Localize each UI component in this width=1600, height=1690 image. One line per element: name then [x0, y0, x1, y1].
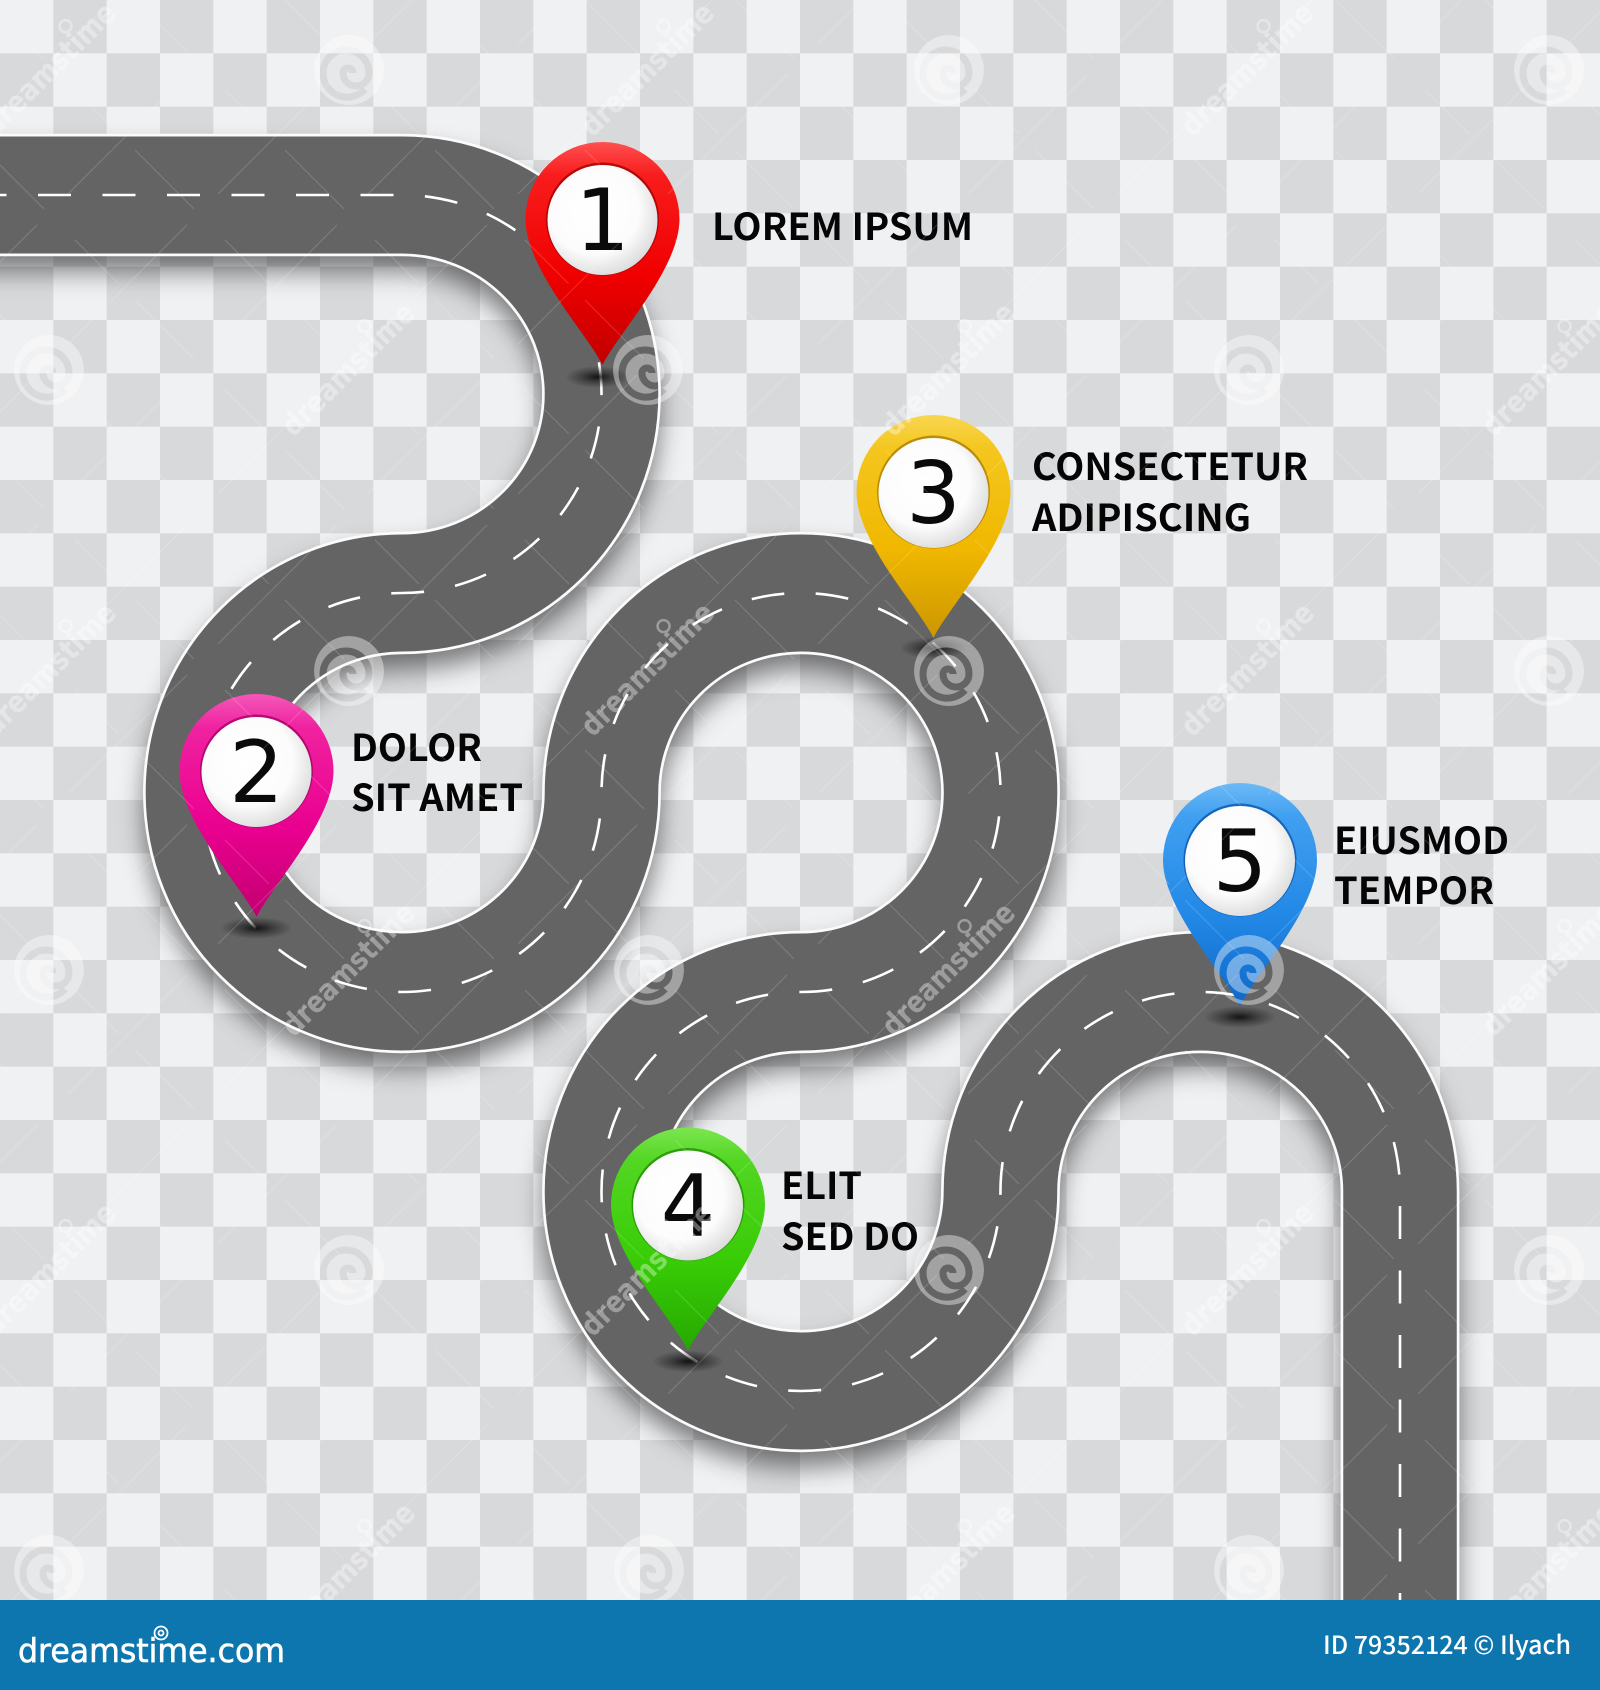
label 1: LOREM IPSUM: [712, 197, 973, 251]
watermark overlay: dreamstime: [875, 1496, 1023, 1644]
label 5: TEMPOR: [1334, 861, 1494, 915]
watermark overlay: dreamstime: [1174, 596, 1322, 744]
pin 2: magenta: [180, 694, 334, 939]
pin 4: green: 4: [661, 1156, 715, 1256]
watermark overlay: dreamstime: [574, 596, 722, 744]
pin 5: blue: [1163, 783, 1317, 1028]
footer logo swirl: [154, 1626, 168, 1640]
road centre dashes: [0, 195, 1400, 1600]
pin 1: red: 1: [575, 171, 630, 271]
label 2: DOLOR: [351, 718, 482, 772]
watermark overlay: dreamstime: [1174, 1196, 1322, 1344]
winding road: [0, 195, 1400, 1656]
image id and credit: ID 79352124 © Ilyach: [1323, 1626, 1571, 1662]
pin 4: green: [611, 1128, 765, 1372]
road white edge: [0, 195, 1400, 1640]
label 2: [351, 718, 523, 822]
road drop shadow: [0, 211, 1400, 1656]
label 5: EIUSMOD: [1334, 811, 1509, 865]
watermark overlay: dreamstime: [875, 296, 1023, 444]
pin 5: blue: 5: [1213, 812, 1267, 912]
label 3: ADIPISCING: [1031, 488, 1251, 542]
watermark overlay: dreamstime: [875, 896, 1023, 1044]
watermark overlay: dreamstime: [275, 1496, 423, 1644]
label 3: CONSECTETUR: [1032, 437, 1308, 491]
label 4: [781, 1156, 919, 1261]
road asphalt: [0, 195, 1400, 1640]
watermark overlay: dreamstime: [275, 896, 423, 1044]
pin 3: yellow: 3: [906, 444, 961, 544]
label 5: [1334, 811, 1509, 915]
watermark overlay: dreamstime: [275, 296, 423, 444]
footer logo text: dreamstime.com: [18, 1631, 285, 1670]
footer bar: [0, 1600, 1600, 1690]
pin 3: yellow: [856, 415, 1010, 659]
pin 1: red: [526, 142, 680, 388]
label 4: ELIT: [781, 1156, 862, 1210]
pin 2: magenta: 2: [229, 723, 284, 823]
label 2: SIT AMET: [351, 768, 523, 822]
watermark overlay: dreamstime: [574, 1196, 722, 1344]
label 4: SED DO: [781, 1207, 919, 1261]
label 3: [1031, 437, 1308, 542]
